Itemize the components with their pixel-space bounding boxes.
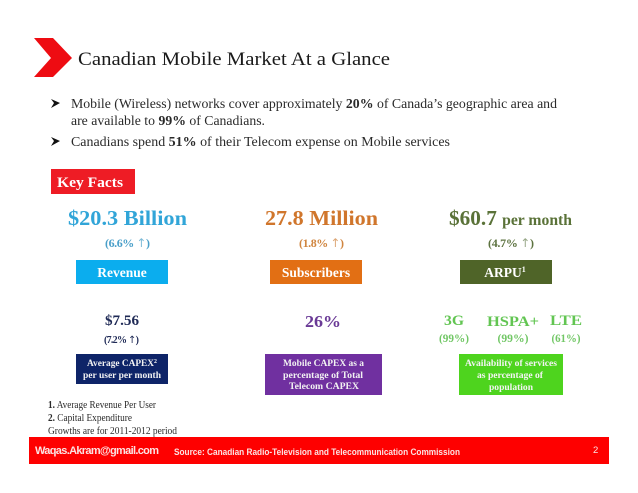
title: Canadian Mobile Market At a Glance	[78, 49, 390, 70]
icon: red chevron	[34, 38, 72, 77]
share label: Mobile CAPEX as a	[283, 359, 364, 369]
arpu label: ARPU	[484, 265, 522, 280]
capex value: $7.56	[105, 313, 139, 329]
share label: percentage of Total	[283, 371, 363, 381]
arpu label: 1	[522, 265, 526, 274]
bullet 2: Canadians spend 51% of their Telecom expense on Mobile services	[71, 135, 450, 150]
footer bar	[29, 437, 609, 464]
lte value: LTE	[550, 313, 582, 329]
footnotes: Growths are for 2011-2012 period	[48, 426, 177, 437]
revenue value: $20.3 Billion	[68, 206, 187, 230]
key facts label	[51, 169, 135, 194]
3g percentage: (99%)	[439, 331, 469, 345]
availability label: population	[489, 383, 534, 393]
capex label: per user per month	[83, 371, 162, 381]
footnotes: 2. Capital Expenditure	[48, 413, 133, 424]
key facts label: Key Facts	[57, 175, 123, 191]
lte percentage: (61%)	[552, 331, 580, 345]
panel: arpu	[449, 206, 572, 284]
availability label	[459, 354, 563, 395]
page number: 2	[593, 445, 598, 456]
arpu growth: (4.7% ↑)	[488, 236, 534, 250]
capex label: 2	[154, 359, 157, 365]
subscribers value: 27.8 Million	[265, 206, 378, 230]
capex label	[76, 354, 168, 384]
footer source: Source: Canadian Radio-Television and Telecommunication Commission	[174, 447, 460, 458]
availability label: as percentage of	[477, 371, 544, 381]
capex growth: (7.2% ↑)	[104, 335, 139, 346]
hspa value: HSPA+	[487, 314, 539, 330]
footnotes: 1. Average Revenue Per User	[48, 400, 157, 411]
revenue growth: (6.6% ↑)	[105, 236, 150, 250]
share value: 26%	[305, 312, 341, 331]
icon: bullet arrow 2	[51, 137, 60, 146]
bullet 1 line 1: Mobile (Wireless) networks cover approximately 20% of Canada’s geographic area and	[71, 97, 557, 112]
bullet list	[51, 97, 557, 150]
icon: bullet arrow 1	[51, 99, 60, 108]
panel: average capex	[76, 313, 168, 384]
panel: mobile capex share	[265, 312, 382, 395]
subscribers growth: (1.8% ↑)	[299, 236, 344, 250]
footnotes	[48, 400, 177, 437]
panel: service availability	[439, 313, 582, 395]
arpu value: $60.7 per month	[449, 206, 572, 230]
3g value: 3G	[444, 313, 464, 329]
revenue label: Revenue	[97, 265, 147, 280]
share label: Telecom CAPEX	[289, 382, 359, 392]
arpu label	[460, 260, 552, 284]
availability label: Availability of services	[465, 359, 557, 369]
hspa percentage: (99%)	[498, 331, 528, 345]
footer email: Waqas.Akram@gmail.com	[35, 445, 159, 457]
share label	[265, 354, 382, 395]
panel: revenue	[68, 206, 187, 284]
panel: subscribers	[265, 206, 378, 284]
capex label: Average CAPEX	[87, 359, 155, 369]
bullet 1 line 2: are available to 99% of Canadians.	[71, 114, 265, 129]
subscribers label: Subscribers	[282, 265, 350, 280]
